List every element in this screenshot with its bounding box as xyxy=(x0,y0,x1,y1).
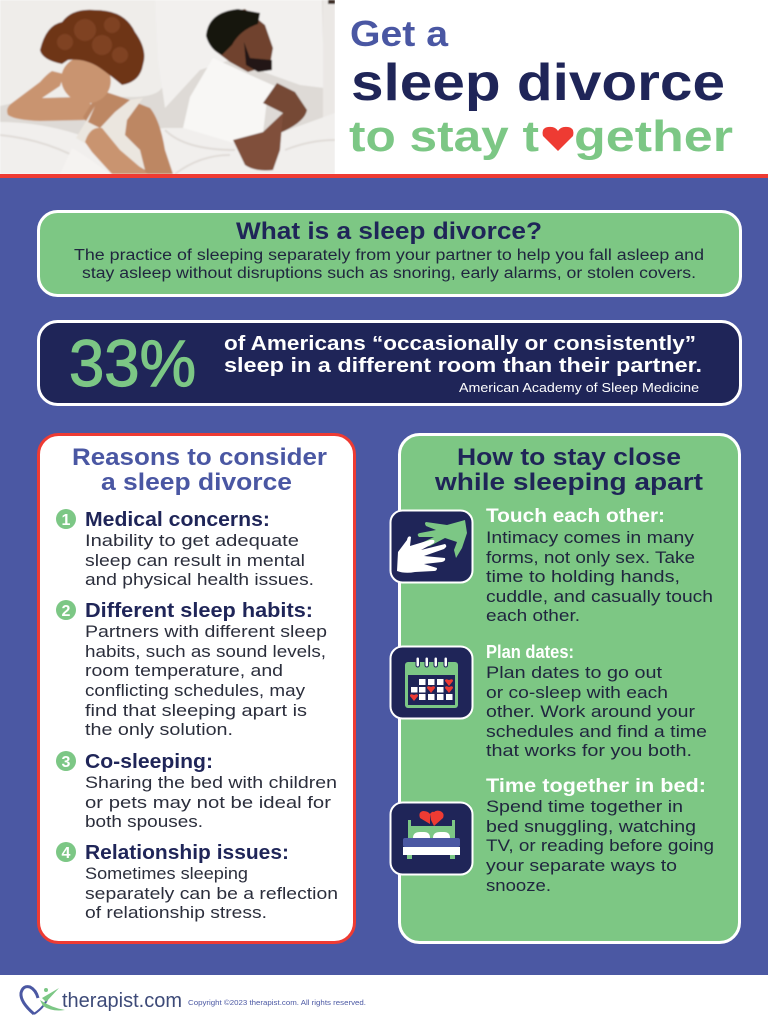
panel: what is a sleep divorce xyxy=(38,212,740,296)
icon: bed with hearts xyxy=(390,802,472,874)
logo mark: heart with figure xyxy=(21,987,65,1014)
icon: heart replacing the letter o xyxy=(543,127,573,151)
title line: to stay together: to stay t xyxy=(349,112,539,161)
photo: couple lying back to back in bed xyxy=(0,0,335,174)
reason 1: 1 xyxy=(62,512,71,529)
big number: 33%: 33% xyxy=(69,326,196,400)
red rule xyxy=(0,174,768,178)
tip: plan dates xyxy=(486,642,707,760)
reason 2: 2 xyxy=(62,603,71,620)
reason 2: conflicting schedules, may xyxy=(85,681,306,700)
reason 1: Medical concerns: xyxy=(85,509,270,531)
reason 2: room temperature, and xyxy=(85,661,283,680)
tip: plan dates: Plan dates: xyxy=(486,642,574,662)
source: American Academy of Sleep Medicine xyxy=(459,380,699,395)
tip: time together in bed: Time together in bed: xyxy=(486,775,706,797)
tip: touch each other: cuddle, and casually touch xyxy=(486,587,713,606)
tip: time together in bed xyxy=(486,775,714,895)
reason 2: habits, such as sound levels, xyxy=(85,642,326,661)
panel: 33 percent statistic xyxy=(38,322,740,404)
reason 4 xyxy=(56,842,338,922)
tip: time together in bed: Spend time together in xyxy=(486,797,683,816)
reason 3: both spouses. xyxy=(85,812,203,831)
tip: touch each other: time to holding hands, xyxy=(486,567,680,586)
tip: touch each other: Touch each other: xyxy=(486,505,665,527)
heading: how to stay close: How to stay close xyxy=(457,444,681,471)
tip: time together in bed: TV, or reading before going xyxy=(486,836,714,855)
heading: reasons: a sleep divorce xyxy=(101,469,292,496)
panel: how to stay close xyxy=(400,434,740,942)
footer xyxy=(21,987,366,1014)
panel: reasons to consider xyxy=(38,434,354,942)
tip: time together in bed: bed snuggling, watching xyxy=(486,817,696,836)
reason 1: Inability to get adequate xyxy=(85,531,299,550)
definition text xyxy=(74,247,704,282)
tip: plan dates: or co-sleep with each xyxy=(486,683,668,702)
reason 4: of relationship stress. xyxy=(85,903,267,922)
heading: what is a sleep divorce: What is a sleep divorce? xyxy=(236,218,542,245)
reason 2: find that sleeping apart is xyxy=(85,701,307,720)
tip: plan dates: other. Work around your xyxy=(486,702,695,721)
title line: to stay together: gether xyxy=(574,112,733,161)
heading: how to stay close: while sleeping apart xyxy=(434,469,703,496)
tip: plan dates: Plan dates to go out xyxy=(486,663,662,682)
reason 3: Sharing the bed with children xyxy=(85,773,337,792)
definition text: stay asleep without disruptions such as snoring, early alarms, or stolen covers. xyxy=(82,265,696,282)
tip: touch each other: Intimacy comes in many xyxy=(486,528,695,547)
tip: touch each other xyxy=(486,505,713,625)
reason 1 xyxy=(56,509,314,589)
reason 4: 4 xyxy=(62,845,71,862)
logo wordmark: therapist.com xyxy=(62,990,182,1012)
reason 1: sleep can result in mental xyxy=(85,551,305,570)
statistic text: sleep in a different room than their partner. xyxy=(224,355,702,377)
heading: reasons xyxy=(72,444,327,496)
tip: touch each other: each other. xyxy=(486,606,580,625)
tip: plan dates: schedules and find a time xyxy=(486,722,707,741)
reason 2: the only solution. xyxy=(85,720,233,739)
title line: Get a: Get a xyxy=(350,13,449,54)
reason 4: Relationship issues: xyxy=(85,842,289,864)
blue background panel xyxy=(0,178,768,975)
definition text: The practice of sleeping separately from your partner to help you fall asleep and xyxy=(74,247,704,264)
heading: how to stay close xyxy=(434,444,703,496)
reason 1: and physical health issues. xyxy=(85,570,314,589)
statistic text: of Americans “occasionally or consistently” xyxy=(224,333,696,355)
reason 4: separately can be a reflection xyxy=(85,884,338,903)
reason 2: Partners with different sleep xyxy=(85,622,327,641)
tip: time together in bed: your separate ways to xyxy=(486,856,677,875)
title line: sleep divorce: sleep divorce xyxy=(351,54,725,112)
icon: hands touching xyxy=(390,510,472,582)
statistic text xyxy=(224,333,702,377)
copyright: Copyright ©2023 therapist.com. All rights reserved. xyxy=(188,998,366,1007)
icon: calendar with hearts xyxy=(390,646,472,718)
reason 3: or pets may not be ideal for xyxy=(85,793,331,812)
tip: plan dates: that works for you both. xyxy=(486,741,692,760)
reason 4: Sometimes sleeping xyxy=(85,864,248,883)
heading: reasons: Reasons to consider xyxy=(72,444,327,471)
reason 3: 3 xyxy=(62,754,71,771)
reason 3 xyxy=(56,751,337,831)
title xyxy=(349,13,733,161)
reason 3: Co-sleeping: xyxy=(85,751,213,773)
tip: touch each other: forms, not only sex. Take xyxy=(486,548,695,567)
reason 2 xyxy=(56,600,327,739)
reason 2: Different sleep habits: xyxy=(85,600,313,622)
tip: time together in bed: snooze. xyxy=(486,876,551,895)
